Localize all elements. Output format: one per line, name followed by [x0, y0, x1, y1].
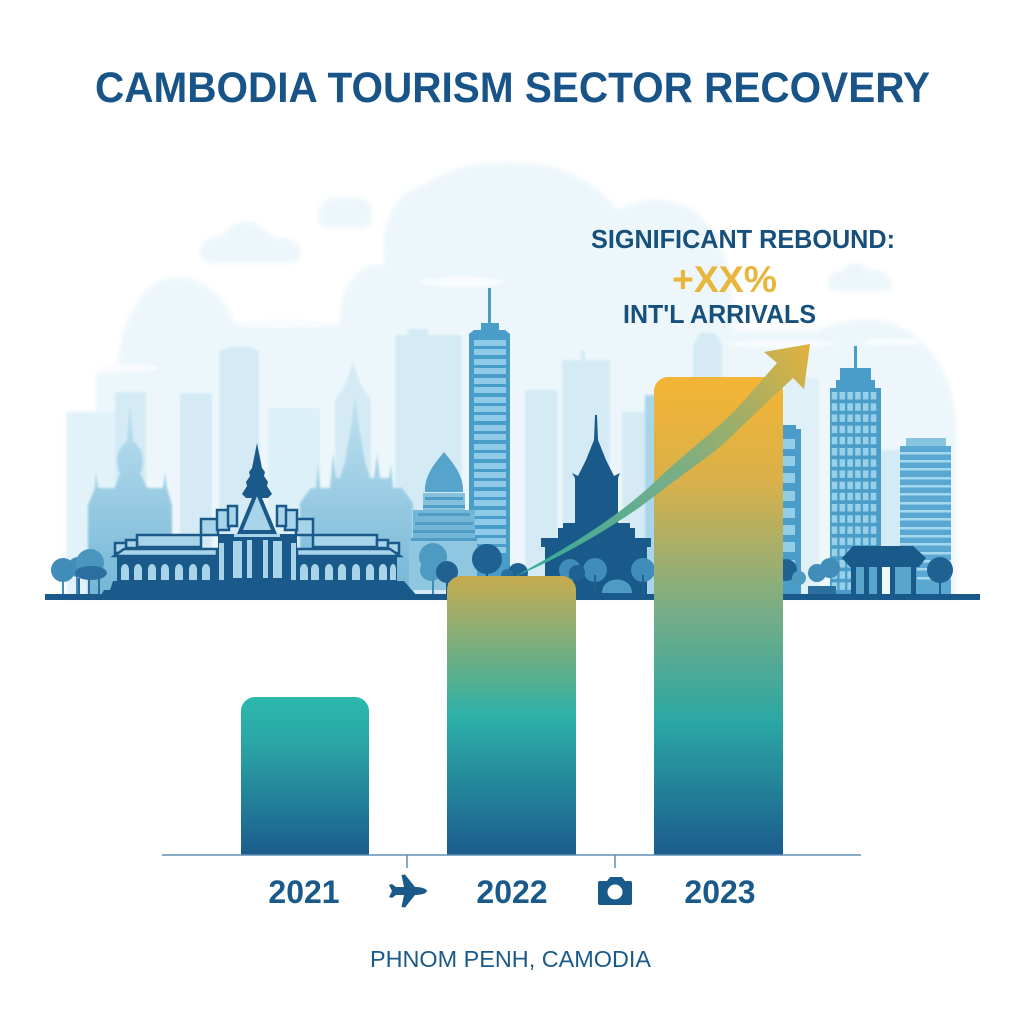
palace wall with columns	[117, 557, 397, 582]
right trees	[775, 557, 953, 595]
palace plinth	[100, 581, 418, 597]
pavilion	[842, 546, 926, 595]
palace columns	[219, 534, 296, 580]
callout label: INT'L ARRIVALS	[623, 299, 816, 329]
tower behind 2023 bar	[783, 425, 801, 595]
palace roof tiers	[114, 491, 400, 556]
middle trees	[419, 543, 528, 595]
ghost temple left	[88, 403, 172, 597]
domed stupa	[409, 452, 477, 590]
left trees	[51, 549, 107, 596]
striped tower	[900, 438, 951, 595]
year label 2021: 2021	[268, 874, 340, 910]
background clouds	[66, 162, 957, 600]
palace spire	[242, 443, 272, 498]
bar 2022	[447, 576, 576, 855]
ghost temple right	[300, 395, 413, 597]
tower windows	[474, 340, 506, 553]
trees	[51, 543, 953, 596]
distant skyline	[67, 329, 902, 598]
bar 2023	[654, 377, 783, 855]
icon: airplane	[389, 874, 427, 908]
white wisp clouds	[99, 277, 921, 372]
royal palace	[100, 443, 418, 597]
growth arrow	[512, 344, 810, 578]
callout value: +XX%	[672, 259, 777, 300]
palace arched windows	[121, 564, 396, 580]
chart axis	[162, 855, 861, 868]
location caption: PHNOM PENH, CAMODIA	[370, 946, 651, 972]
callout heading: SIGNIFICANT REBOUND:	[591, 224, 895, 254]
callout	[591, 224, 895, 329]
year label 2022: 2022	[476, 874, 548, 910]
dark temple	[541, 415, 651, 597]
right towers	[783, 346, 951, 595]
title: CAMBODIA TOURISM SECTOR RECOVERY	[95, 64, 930, 112]
ground line	[45, 594, 980, 600]
bar 2021	[241, 697, 369, 855]
central tower	[469, 288, 510, 590]
icon: camera	[598, 877, 632, 905]
grid tower	[830, 346, 881, 595]
year label 2023: 2023	[684, 874, 756, 910]
temple trees	[559, 558, 655, 595]
